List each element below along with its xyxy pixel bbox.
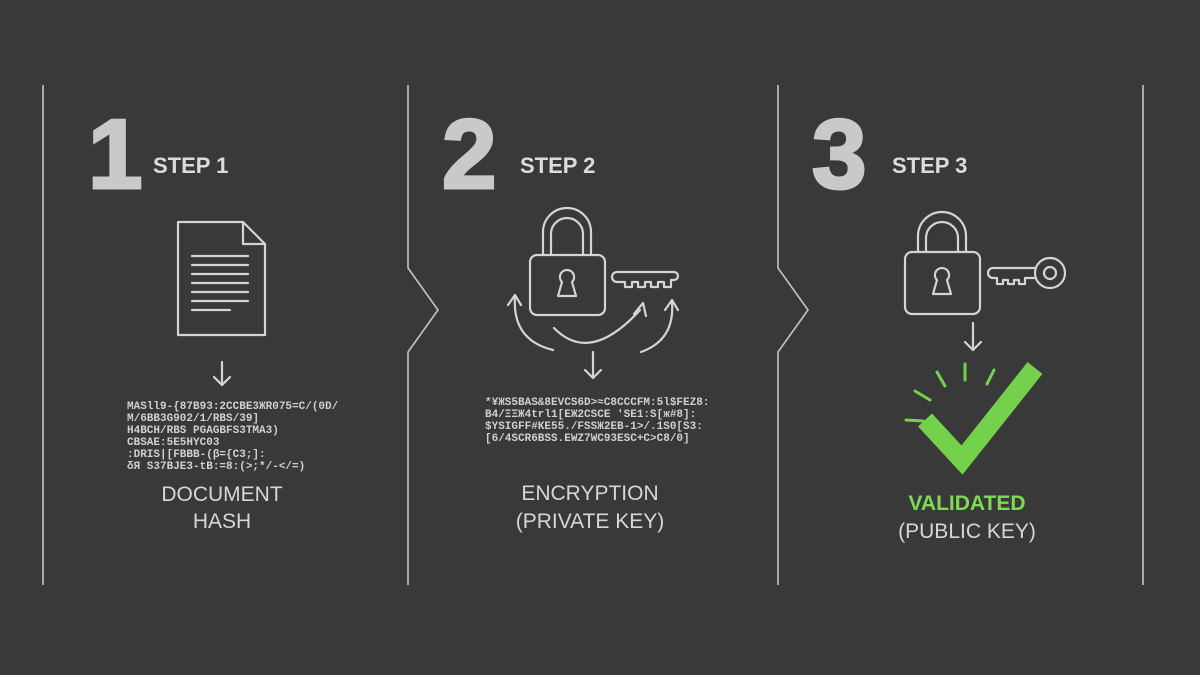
arrow: down [585,352,601,378]
label: document hash: DOCUMENT [161,483,283,506]
panel: step 3 [812,99,1065,543]
heading: step 3 [812,99,967,209]
heading: step 3: STEP 3 [892,153,967,178]
label: encryption [516,482,664,533]
heading: step 1 [88,99,228,209]
label: validated: (PUBLIC KEY) [898,520,1036,543]
panel: step 1 [88,99,339,533]
label: document hash: HASH [193,510,251,533]
heading: step 2: 2 [442,99,497,209]
text: encrypted output: [6/4SCR6BSS.EWZ7WC93ESC+C>C8/0] [485,433,690,445]
label: encryption: ENCRYPTION [521,482,659,505]
text: hash output: CBSAE:5E5HYC03 [127,437,220,449]
text: hash output: :DRIS|[FBBB-(β={C3;]: [127,449,266,461]
label: encryption: (PRIVATE KEY) [516,510,664,533]
heading: step 1: 1 [88,99,143,209]
icon: lock with private key [508,208,678,352]
text: encrypted output: $YSIGFF#KE55./FSSЖ2EB-1>/.1S0[S3: [485,421,703,433]
label: validated: VALIDATED [908,492,1026,515]
icon: lock with public key [905,212,1065,314]
text: encrypted output: *¥ЖS5BAS&8EVCS6D>≈C8CCCFM:5l$FEZ8: [485,397,709,409]
icon: document [178,222,265,335]
arrow: down [965,323,981,350]
text: encrypted output: B4/ΞΞЖ4trl1[EЖ2CSCE 'SE1:S[ж#8]: [485,409,696,421]
heading: step 2: STEP 2 [520,153,595,178]
heading: step 1: STEP 1 [153,153,228,178]
label: validated [898,492,1036,543]
heading: step 3: 3 [812,99,867,209]
heading: step 2 [442,99,595,209]
text: encrypted output [485,397,709,445]
text: hash output [127,401,339,473]
label: document hash [161,483,283,533]
icon: green checkmark [906,364,1035,460]
text: hash output: M/6BB3G902/1/RBS/39] [127,413,259,425]
text: hash output: MASll9-{87B93:2CCBE3ЖR075=C/(0D/ [127,401,339,413]
text: hash output: H4BCH/RBS PGAGBFS3TMA3) [127,425,279,437]
panel: step 2 [442,99,709,533]
text: hash output: δЯ S37BJE3-tB:=8:(>;*/-</=) [127,461,305,473]
arrow: down [214,362,230,385]
